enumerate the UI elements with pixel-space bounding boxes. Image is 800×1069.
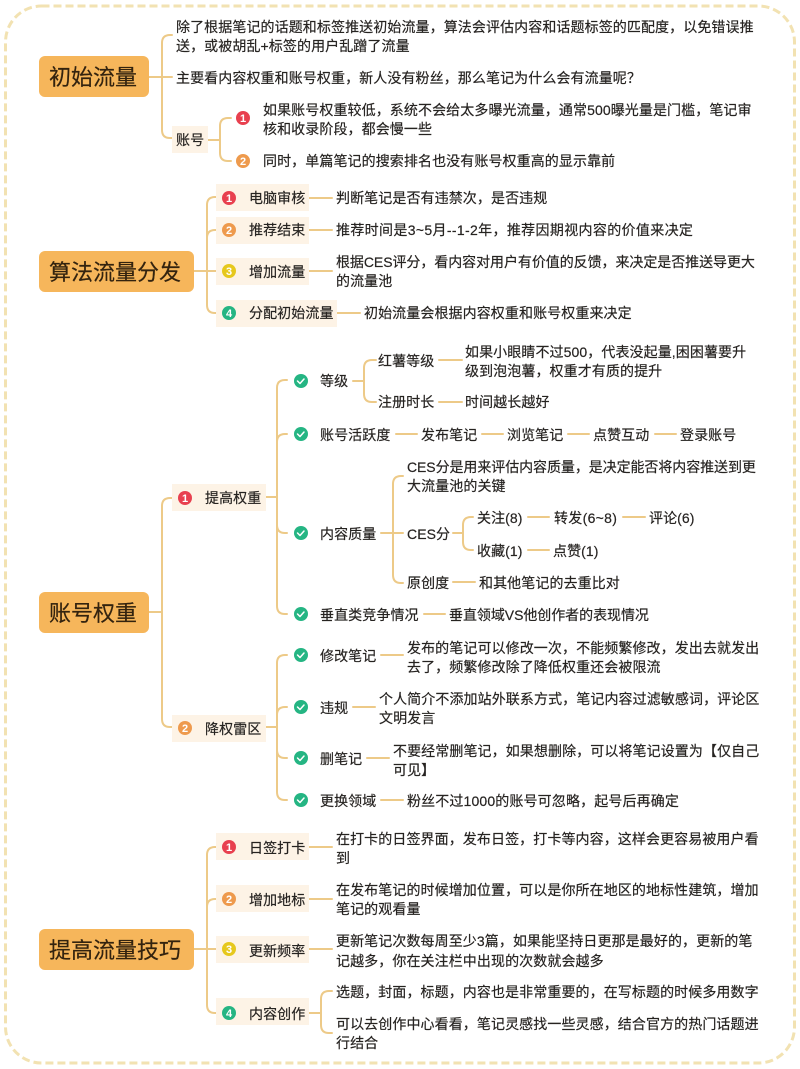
step: 推荐结束: 推荐结束 [249,222,305,238]
item: 修改笔记: 发布的笔记可以修改一次，不能频繁修改，发出去就发出 [407,640,759,656]
item: 垂直类竞争情况: 垂直类竞争情况 [320,607,419,623]
item: 等级: 级到泡泡薯，权重才有质的提升 [465,363,662,379]
section: 算法流量分发 [39,184,755,327]
section: 提高流量技巧 [39,831,759,1051]
section: 账号权重 [39,344,759,809]
item: 内容质量: 收藏(1) [477,543,523,559]
step: 更新频率 [216,936,309,963]
heading: 算法流量分发 [39,251,194,292]
heading: 初始流量 [39,56,149,97]
step: 分配初始流量: 分配初始流量 [249,305,334,321]
item: 更换领域: 粉丝不过1000的账号可忽略，起号后再确定 [407,793,679,809]
step: 增加地标: 增加地标 [249,892,305,908]
step: 推荐结束 [216,217,309,244]
icon: 1: 1 [240,113,246,125]
item: 内容质量 [294,459,756,591]
text: 推荐时间: 推荐时间是3~5月--1-2年，推荐因期视内容的价值来决定 [336,222,693,238]
text: 频率说明: 记越多，你在关注栏中出现的次数就会越多 [336,953,604,969]
step: 电脑审核: 电脑审核 [249,190,305,206]
text: 权重说明: 主要看内容权重和账号权重，新人没有粉丝，那么笔记为什么会有流量呢？ [176,70,641,86]
step: 增加地标 [216,885,309,912]
step: 内容创作: 内容创作 [249,1006,305,1022]
item: 等级: 时间越长越好 [465,394,550,410]
text: 日签说明: 到 [336,850,350,866]
step: 内容创作: 4 [226,1008,233,1020]
icon: 1 [236,111,250,125]
step: 电脑审核: 1 [226,193,232,205]
step: 更新频率: 3 [226,944,232,956]
text: 频率说明: 更新笔记次数每周至少3篇，如果能坚持日更那是最好的，更新的笔 [336,933,752,949]
item: 修改笔记: 去了，频繁修改除了降低权重还会被限流 [407,659,661,675]
branch: 降权雷区: 降权雷区 [205,721,261,737]
item: 内容质量: 转发(6~8) [554,510,617,526]
step: 内容创作 [216,998,309,1025]
item: 内容质量: 和其他笔记的去重比对 [479,575,620,591]
step: 增加流量: 3 [226,266,232,278]
item: 等级: 如果小眼睛不过500，代表没起量,困困薯要升 [465,344,746,360]
step: 日签打卡: 1 [226,842,232,854]
item: 内容质量: 内容质量 [320,526,376,542]
heading: 初始流量: 初始流量 [49,65,137,90]
item: 内容质量: 点赞(1) [553,543,599,559]
step: 日签打卡: 日签打卡 [249,840,305,856]
text: 创作中心 [336,1016,759,1051]
text: 地标说明 [336,882,759,917]
item: 违规: 文明发言 [379,710,435,726]
text: 账号权重较低: 如果账号权重较低，系统不会给太多曝光流量，通常500曝光量是门槛，笔记审 [263,102,752,118]
item: 违规: 违规 [320,700,348,716]
item: 删笔记: 不要经常删笔记，如果想删除，可以将笔记设置为【仅自己 [393,743,759,759]
text: CES评分: 根据CES评分，看内容对用户有价值的反馈，来决定是否推送导更大 [336,254,755,270]
step: 增加地标: 2 [226,894,232,906]
text: 搜索排名: 同时，单篇笔记的搜索排名也没有账号权重高的显示靠前 [263,153,615,169]
step: 推荐结束: 2 [226,225,232,237]
step: 分配初始流量: 4 [226,308,233,320]
item: 等级 [294,344,746,410]
text: 选题说明: 选题，封面，标题，内容也是非常重要的，在写标题的时候多用数字 [336,984,759,1000]
text: CES评分 [336,254,755,289]
text: 匹配度说明: 送，或被胡乱+标签的用户乱蹭了流量 [176,38,410,54]
item: 账号活跃度: 登录账号 [680,427,736,443]
step: 电脑审核 [216,184,309,211]
item: 内容质量: CES分 [407,526,450,542]
heading: 账号权重 [39,592,149,633]
item: 内容质量: 原创度 [407,575,449,591]
text: 地标说明: 在发布笔记的时候增加位置，可以是你所在地区的地标性建筑，增加 [336,882,759,898]
text: 初始流量决定: 初始流量会根据内容权重和账号权重来决定 [364,305,632,321]
step: 更新频率: 更新频率 [249,943,305,959]
item: 等级: 红薯等级 [378,353,434,369]
item: 删笔记 [294,743,759,778]
item: 修改笔记 [294,640,759,675]
heading: 提高流量技巧 [39,929,194,970]
item: 修改笔记: 修改笔记 [320,648,376,664]
item: 垂直类竞争情况 [294,607,649,623]
item: 等级: 等级 [320,373,348,389]
item: 账号活跃度: 账号活跃度 [320,427,390,443]
branch: 降权雷区: 2 [182,723,188,735]
item: 账号活跃度: 发布笔记 [421,427,477,443]
text: 账号权重较低 [263,102,752,137]
item: 内容质量: 关注(8) [477,510,523,526]
branch: 降权雷区 [172,715,266,742]
heading: 算法流量分发: 算法流量分发 [49,260,181,285]
item: 删笔记: 可见】 [393,762,435,778]
icon: 2 [236,154,250,168]
heading: 账号权重: 账号权重 [49,601,137,626]
text: 匹配度说明 [176,19,754,54]
label: 账号: 账号 [176,132,204,148]
item: 内容质量: 大流量池的关键 [407,478,506,494]
item: 账号活跃度: 浏览笔记 [507,427,563,443]
item: 违规 [294,691,759,726]
text: CES评分: 的流量池 [336,273,392,289]
item: 内容质量: CES分是用来评估内容质量，是决定能否将内容推送到更 [407,459,756,475]
item: 删笔记: 删笔记 [320,751,362,767]
label: 账号 [172,126,208,153]
text: 创作中心: 可以去创作中心看看，笔记灵感找一些灵感，结合官方的热门话题进 [336,1016,759,1032]
item: 账号活跃度: 点赞互动 [593,427,649,443]
item: 垂直类竞争情况: 垂直领域VS他创作者的表现情况 [449,607,649,623]
branch: 提高权重 [172,484,266,511]
item: 内容质量: 评论(6) [649,510,695,526]
text: 地标说明: 笔记的观看量 [336,901,421,917]
item: 更换领域: 更换领域 [320,793,376,809]
step: 增加流量: 增加流量 [249,264,305,280]
step: 分配初始流量 [216,300,337,327]
text: 判断笔记: 判断笔记是否有违禁次，是否违规 [336,190,547,206]
item: 等级: 注册时长 [378,394,434,410]
heading: 提高流量技巧: 提高流量技巧 [49,938,181,963]
icon: 2: 2 [240,156,246,168]
branch: 提高权重: 提高权重 [205,490,261,506]
text: 创作中心: 行结合 [336,1035,378,1051]
text: 账号权重较低: 核和收录阶段，都会慢一些 [263,121,432,137]
item: 账号活跃度 [294,427,736,443]
text: 日签说明: 在打卡的日签界面，发布日签，打卡等内容，这样会更容易被用户看 [336,831,759,847]
text: 频率说明 [336,933,752,969]
text: 匹配度说明: 除了根据笔记的话题和标签推送初始流量，算法会评估内容和话题标签的匹配度，以免错误推 [176,19,754,35]
branch: 提高权重: 1 [182,493,188,505]
step: 增加流量 [216,258,309,285]
text: 日签说明 [336,831,759,866]
step: 日签打卡 [216,833,309,860]
item: 违规: 个人简介不添加站外联系方式，笔记内容过滤敏感词，评论区 [379,691,759,707]
section: 初始流量 [39,19,754,169]
